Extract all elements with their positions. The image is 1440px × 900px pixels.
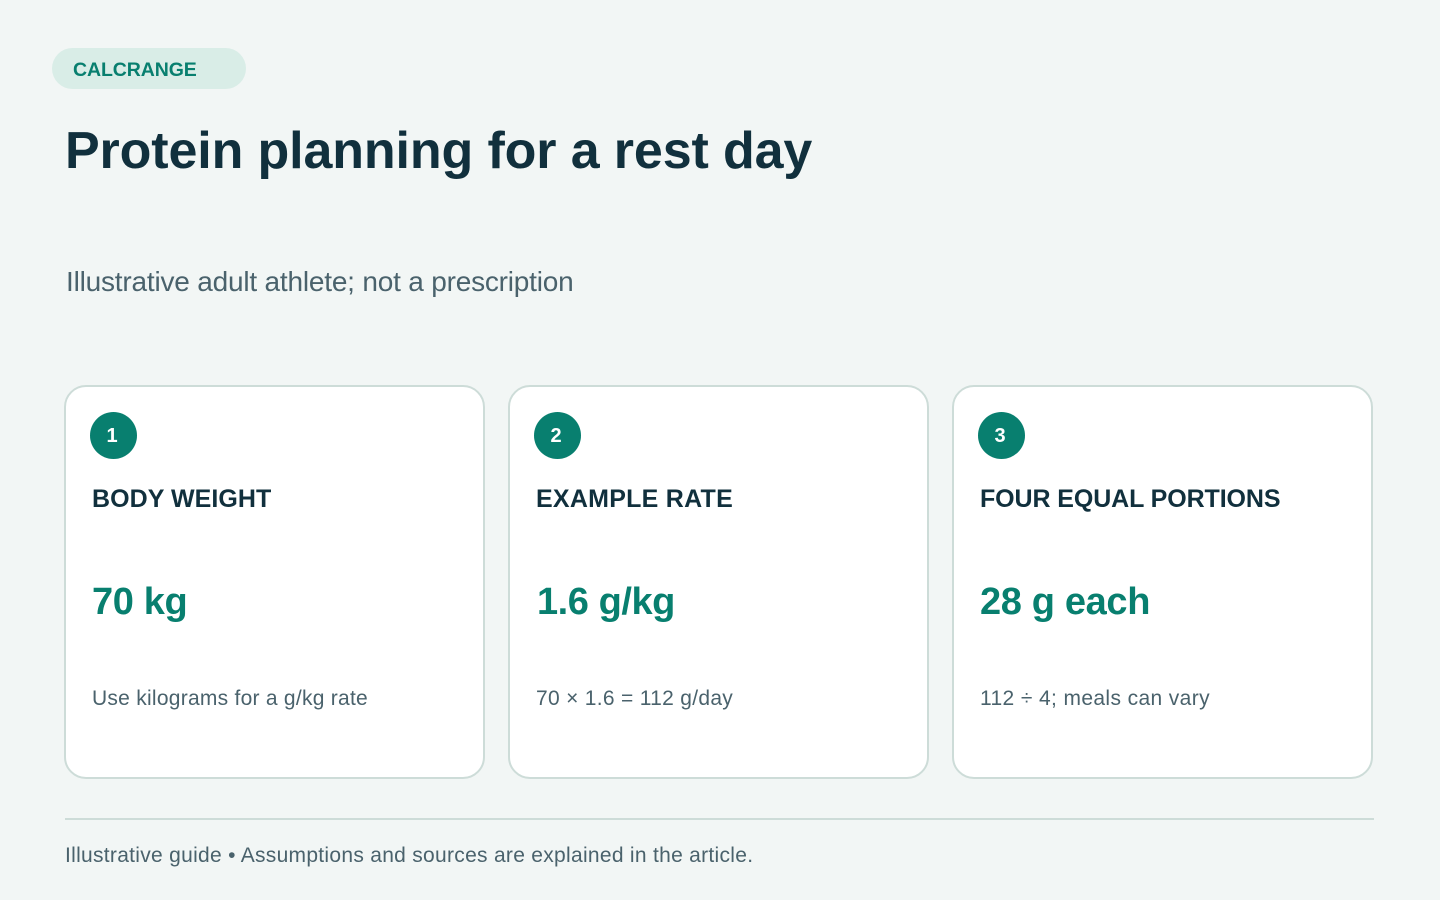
footer note: Illustrative guide • Assumptions and sources are explained in the article. bbox=[65, 844, 753, 867]
panel: four equal portions bbox=[952, 385, 1373, 779]
step badge 3 bbox=[978, 412, 1025, 459]
step badge 1: 1 bbox=[106, 425, 118, 447]
note: kilograms: Use kilograms for a g/kg rate bbox=[92, 687, 368, 710]
note: division: 112 ÷ 4; meals can vary bbox=[980, 687, 1210, 710]
heading: body weight: BODY WEIGHT bbox=[92, 485, 271, 513]
step badge 2 bbox=[534, 412, 581, 459]
subtitle: Illustrative adult athlete; not a prescription bbox=[66, 266, 574, 297]
note: calculation: 70 × 1.6 = 112 g/day bbox=[536, 687, 733, 710]
step badge 3: 3 bbox=[994, 425, 1006, 447]
brand pill bbox=[52, 48, 246, 89]
value: 70 kg: 70 kg bbox=[92, 581, 187, 623]
step badge 2: 2 bbox=[550, 425, 562, 447]
heading: four equal portions: FOUR EQUAL PORTIONS bbox=[980, 485, 1280, 513]
brand name: CALCRANGE bbox=[73, 59, 197, 81]
panel: example rate bbox=[508, 385, 929, 779]
value: 28 g each: 28 g each bbox=[980, 581, 1150, 623]
title: Protein planning for a rest day bbox=[65, 122, 812, 180]
panel: body weight bbox=[64, 385, 485, 779]
heading: example rate: EXAMPLE RATE bbox=[536, 485, 733, 513]
step badge 1 bbox=[90, 412, 137, 459]
value: 1.6 g/kg: 1.6 g/kg bbox=[537, 581, 675, 623]
